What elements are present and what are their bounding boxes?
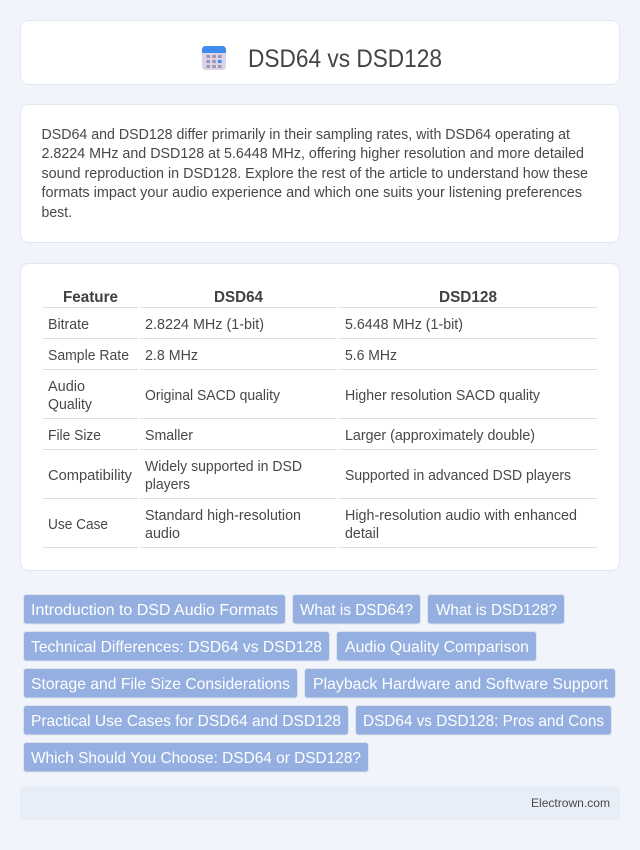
row: audio quality: Quality — [48, 397, 93, 413]
link: what is DSD128 — [428, 594, 564, 624]
link: which should you choose: Which Should You Choose: DSD64 or DSD128? — [31, 750, 361, 767]
row: sample rate: 5.6 MHz — [345, 348, 397, 364]
link: what is DSD64: What is DSD64? — [300, 602, 413, 619]
row: file size: Smaller — [145, 428, 193, 444]
row: audio quality: Audio — [48, 379, 85, 395]
row: sample rate: 2.8 MHz — [145, 348, 198, 364]
row: audio quality: Original SACD quality — [145, 388, 281, 404]
intro text: DSD64 and DSD128 differ primarily in their sampling rates, with DSD64 operating at — [42, 127, 570, 143]
link: playback hardware — [304, 668, 616, 698]
table header: DSD128 — [439, 289, 497, 306]
panel: introduction — [20, 104, 620, 242]
link: what is DSD64 — [292, 594, 420, 624]
panel: comparison table — [20, 264, 620, 570]
row: use case: Standard high-resolution — [145, 508, 301, 524]
row: compatibility: Compatibility — [48, 468, 133, 484]
panel: header — [20, 20, 620, 84]
row: bitrate: 5.6448 MHz (1-bit) — [345, 317, 463, 333]
table header — [63, 289, 497, 306]
intro text: best. — [42, 205, 72, 221]
link: what is DSD128: What is DSD128? — [436, 602, 557, 619]
footer — [20, 786, 620, 820]
footer: Electrown.com — [531, 796, 610, 810]
table header: DSD64 — [214, 289, 263, 306]
intro text: formats impact your audio experience and which one suits your listening preferences — [42, 185, 582, 201]
row: file size: Larger (approximately double) — [345, 428, 535, 444]
link: practical use cases: Practical Use Cases for DSD64 and DSD128 — [31, 713, 341, 730]
row: sample rate: Sample Rate — [48, 348, 129, 364]
link: introduction: Introduction to DSD Audio Formats — [31, 602, 278, 619]
row: file size: File Size — [48, 428, 101, 444]
row: sample rate — [48, 348, 397, 364]
row: use case — [48, 508, 577, 542]
icon: calendar grid — [202, 46, 226, 70]
panel: topic links — [24, 594, 616, 772]
row: file size — [48, 428, 535, 444]
link: playback hardware: Playback Hardware and Software Support — [313, 676, 609, 693]
link: introduction — [24, 594, 286, 624]
link: storage and file size: Storage and File Size Considerations — [31, 676, 290, 693]
row: audio quality: Higher resolution SACD quality — [345, 388, 541, 404]
title: DSD64 vs DSD128 — [248, 45, 442, 73]
link: technical differences — [24, 632, 330, 661]
intro text — [42, 127, 588, 221]
row: compatibility: players — [145, 477, 190, 493]
link: technical differences: Technical Differences: DSD64 vs DSD128 — [31, 639, 322, 656]
link: practical use cases — [24, 706, 348, 735]
link: audio quality comparison: Audio Quality Comparison — [345, 639, 529, 656]
intro text: 2.8224 MHz and DSD128 at 5.6448 MHz, offering higher resolution and more detailed — [42, 146, 584, 162]
row: use case: detail — [345, 526, 379, 542]
row: compatibility: Supported in advanced DSD players — [345, 468, 571, 484]
row: use case: High-resolution audio with enhanced — [345, 508, 577, 524]
row: audio quality — [48, 379, 541, 413]
link: which should you choose — [24, 742, 368, 772]
row: compatibility — [48, 459, 571, 493]
link: audio quality comparison — [336, 632, 536, 661]
row: bitrate: Bitrate — [48, 317, 89, 333]
table header: Feature — [63, 289, 118, 306]
link: pros and cons: DSD64 vs DSD128: Pros and Cons — [363, 713, 604, 730]
row: use case: Use Case — [48, 517, 108, 533]
row: bitrate: 2.8224 MHz (1-bit) — [145, 317, 264, 333]
row: use case: audio — [145, 526, 180, 542]
row: compatibility: Widely supported in DSD — [145, 459, 302, 475]
intro text: sound reproduction in DSD128. Explore the rest of the article to understand how these — [42, 166, 588, 182]
link: pros and cons — [356, 706, 612, 735]
row: bitrate — [48, 317, 463, 333]
link: storage and file size — [24, 668, 298, 698]
